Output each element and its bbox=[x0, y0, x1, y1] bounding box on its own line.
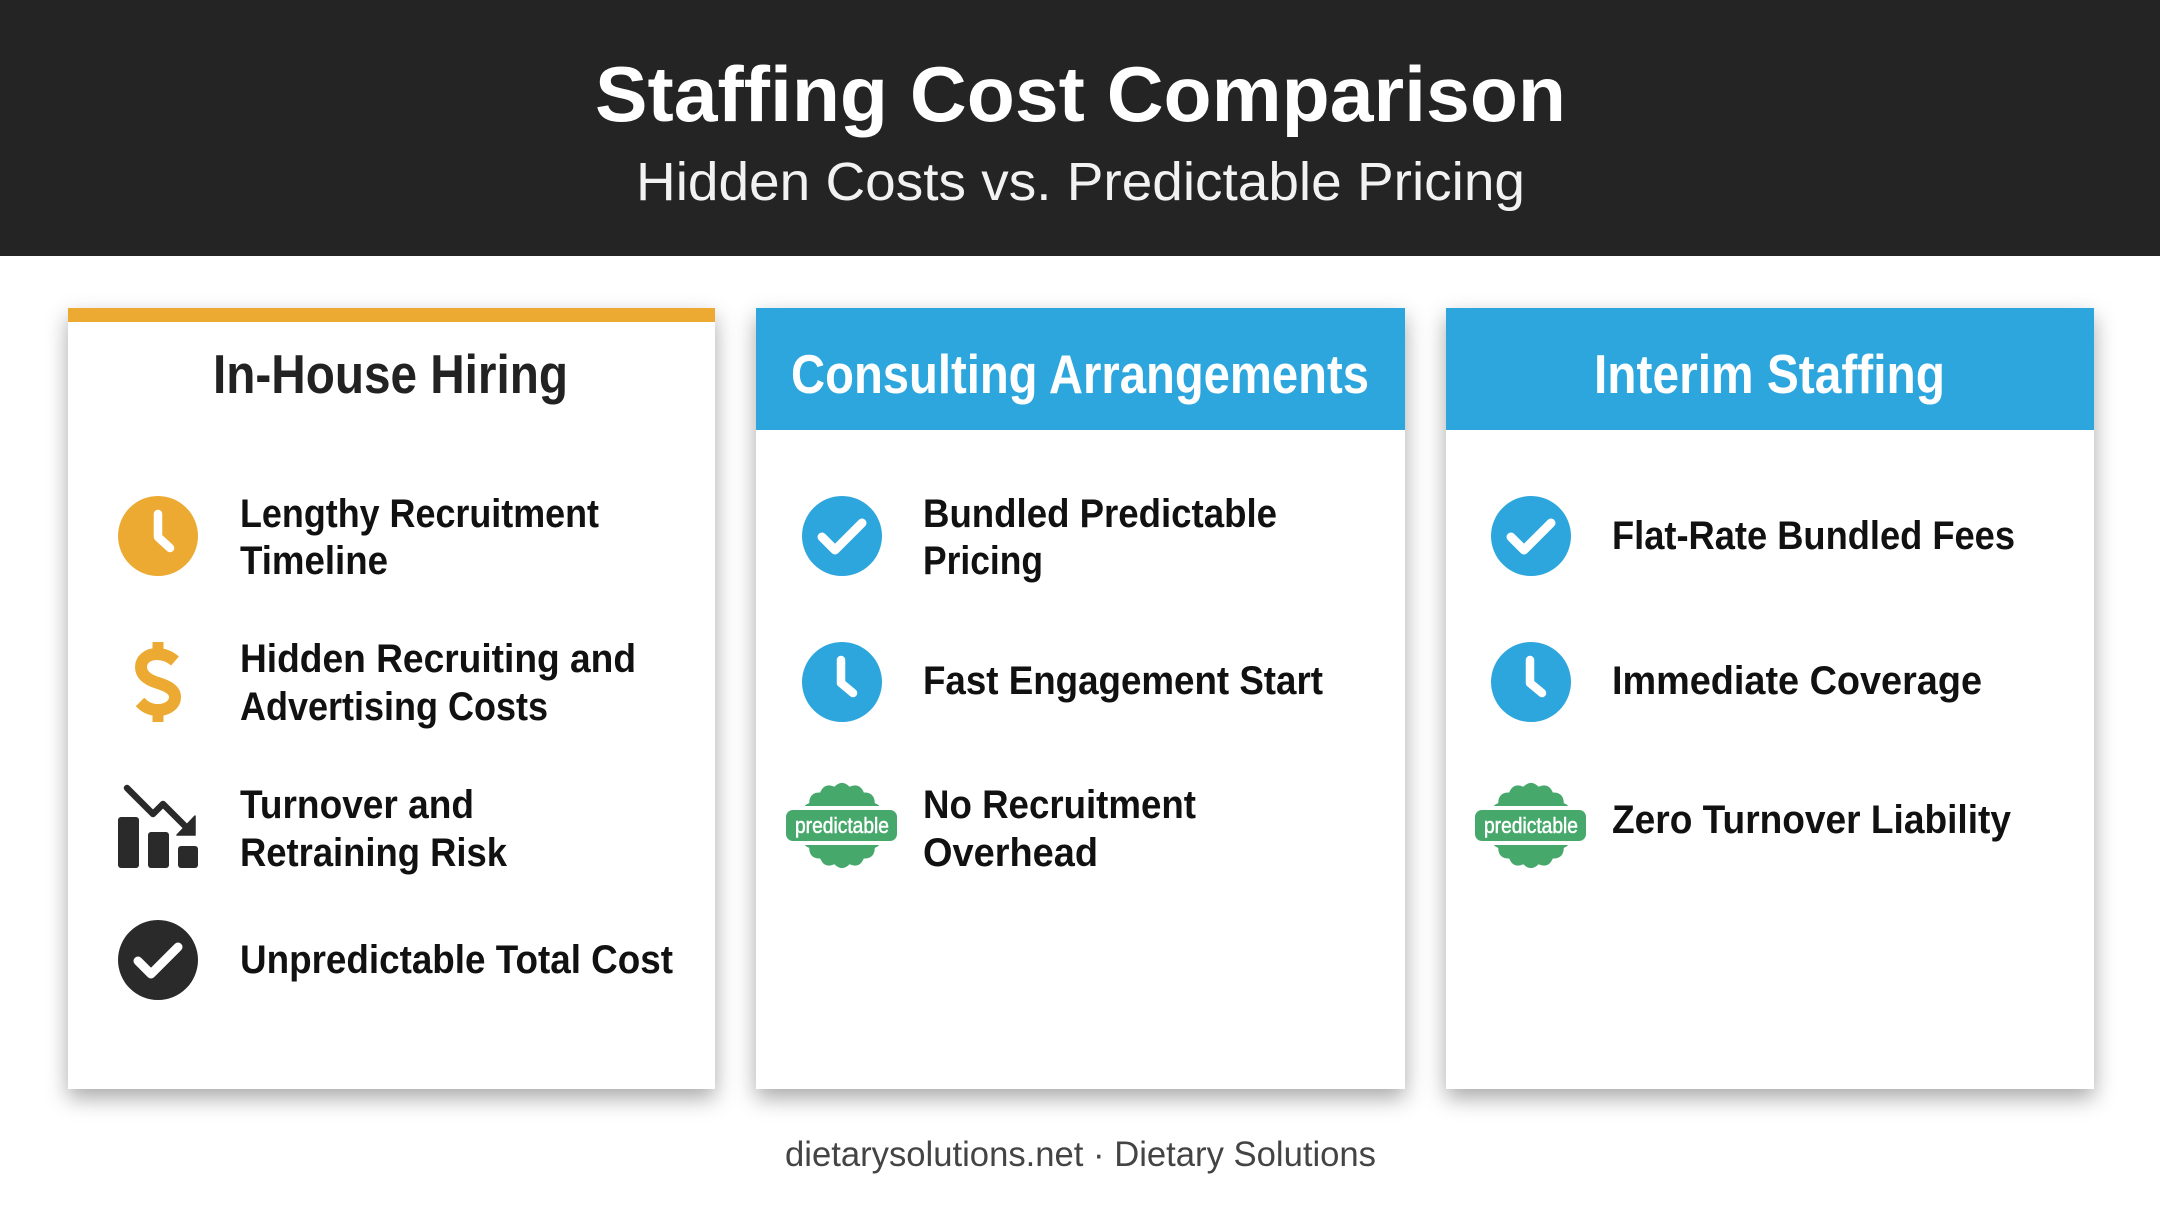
item: zero turnover bbox=[1475, 783, 2012, 868]
text: Lengthy Recruitment Timeline: Timeline bbox=[240, 539, 388, 583]
text: Turnover and Retraining Risk bbox=[240, 783, 508, 875]
icon: blue check circle bbox=[1491, 496, 1571, 576]
text: No Recruitment Overhead bbox=[923, 783, 1196, 875]
panel: In-House Hiring bbox=[68, 308, 715, 1089]
text: Lengthy Recruitment Timeline bbox=[240, 492, 599, 583]
item: unpredictable total cost bbox=[118, 920, 673, 1000]
text: Flat-Rate Bundled Fees: Flat-Rate Bundled Fees bbox=[1612, 514, 2015, 558]
icon: dark check circle bbox=[118, 920, 198, 1000]
text: Bundled Predictable Pricing: Pricing bbox=[923, 539, 1043, 583]
panel: Interim Staffing bbox=[1446, 308, 2094, 1089]
icon: blue check circle bbox=[802, 496, 882, 576]
icon: falling bar chart bbox=[118, 788, 198, 868]
text: Hidden Recruiting and Advertising Costs: Hidden Recruiting and bbox=[240, 637, 636, 681]
icon: predictable badge: predictable bbox=[1484, 813, 1578, 838]
text: Hidden Recruiting and Advertising Costs: Advertising Costs bbox=[240, 685, 548, 729]
item: fast start bbox=[802, 642, 1323, 722]
header band bbox=[0, 0, 2160, 256]
icon: predictable badge: predictable bbox=[795, 813, 889, 838]
text: Unpredictable Total Cost: Unpredictable Total Cost bbox=[240, 938, 673, 982]
text: Immediate Coverage: Immediate Coverage bbox=[1612, 659, 1982, 703]
item: flat-rate fees bbox=[1491, 496, 2015, 576]
text: Bundled Predictable Pricing bbox=[923, 492, 1277, 583]
text: Fast Engagement Start: Fast Engagement Start bbox=[923, 659, 1323, 703]
text: Turnover and Retraining Risk: Turnover and bbox=[240, 783, 474, 827]
item: immediate coverage bbox=[1491, 642, 1982, 722]
item: lengthy recruitment timeline bbox=[118, 492, 599, 583]
text: Zero Turnover Liability: Zero Turnover Liability bbox=[1612, 798, 2012, 842]
text: Bundled Predictable Pricing: Bundled Predictable bbox=[923, 492, 1277, 536]
text: No Recruitment Overhead: Overhead bbox=[923, 831, 1098, 875]
icon: predictable badge bbox=[786, 783, 897, 868]
heading: In-House Hiring: In-House Hiring bbox=[213, 343, 568, 405]
text: Turnover and Retraining Risk: Retraining Risk bbox=[240, 831, 508, 875]
heading: Interim Staffing: Interim Staffing bbox=[1594, 343, 1945, 405]
title: Staffing Cost Comparison bbox=[595, 50, 1566, 138]
text: Hidden Recruiting and Advertising Costs bbox=[240, 637, 636, 729]
item: hidden costs bbox=[140, 637, 636, 729]
subtitle: Hidden Costs vs. Predictable Pricing bbox=[636, 152, 1525, 212]
item: no recruitment overhead bbox=[786, 783, 1196, 875]
icon: blue clock bbox=[1491, 642, 1571, 722]
icon: predictable badge bbox=[1475, 783, 1586, 868]
icon: orange clock bbox=[118, 496, 198, 576]
item: bundled pricing bbox=[802, 492, 1277, 583]
panel: Consulting Arrangements bbox=[756, 308, 1405, 1089]
heading: Consulting Arrangements: Consulting Arrangements bbox=[791, 343, 1369, 405]
text: No Recruitment Overhead: No Recruitment bbox=[923, 783, 1196, 827]
text: Lengthy Recruitment Timeline: Lengthy Recruitment bbox=[240, 492, 599, 536]
footer: dietarysolutions.net · Dietary Solutions bbox=[785, 1135, 1376, 1174]
icon: blue clock bbox=[802, 642, 882, 722]
icon: dollar sign bbox=[140, 642, 175, 722]
item: turnover risk bbox=[118, 783, 508, 875]
